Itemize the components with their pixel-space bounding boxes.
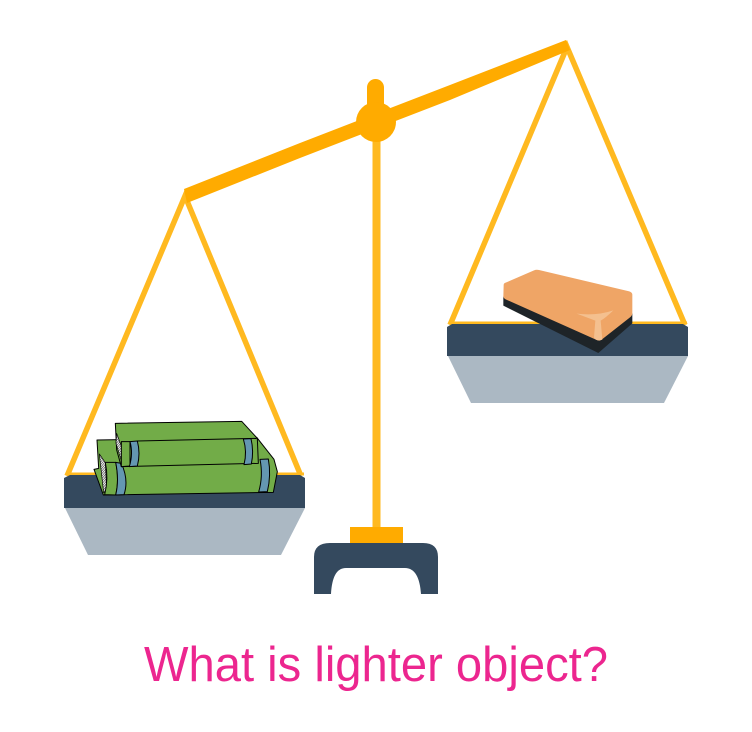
icon: eraser xyxy=(503,270,632,353)
right pan tray xyxy=(447,324,688,356)
left pan underside xyxy=(65,508,305,555)
top knob xyxy=(367,79,384,129)
title: What is lighter object? xyxy=(144,638,608,692)
left pan tray xyxy=(64,475,305,508)
lower book xyxy=(94,437,277,495)
pivot circle xyxy=(356,102,396,142)
left pan strings xyxy=(66,196,304,476)
eraser orange top xyxy=(503,270,632,340)
panel: left pan xyxy=(64,475,305,555)
base plate xyxy=(350,527,403,544)
eraser dark base xyxy=(503,297,632,353)
base foot xyxy=(314,543,438,594)
right pan underside xyxy=(448,356,688,403)
right pan strings xyxy=(449,47,687,325)
panel: right pan xyxy=(447,324,688,403)
upper book xyxy=(115,421,258,467)
tilted beam xyxy=(184,40,570,203)
central post xyxy=(372,135,380,530)
icon: stack of green books xyxy=(94,421,277,495)
eraser highlight xyxy=(577,310,613,341)
